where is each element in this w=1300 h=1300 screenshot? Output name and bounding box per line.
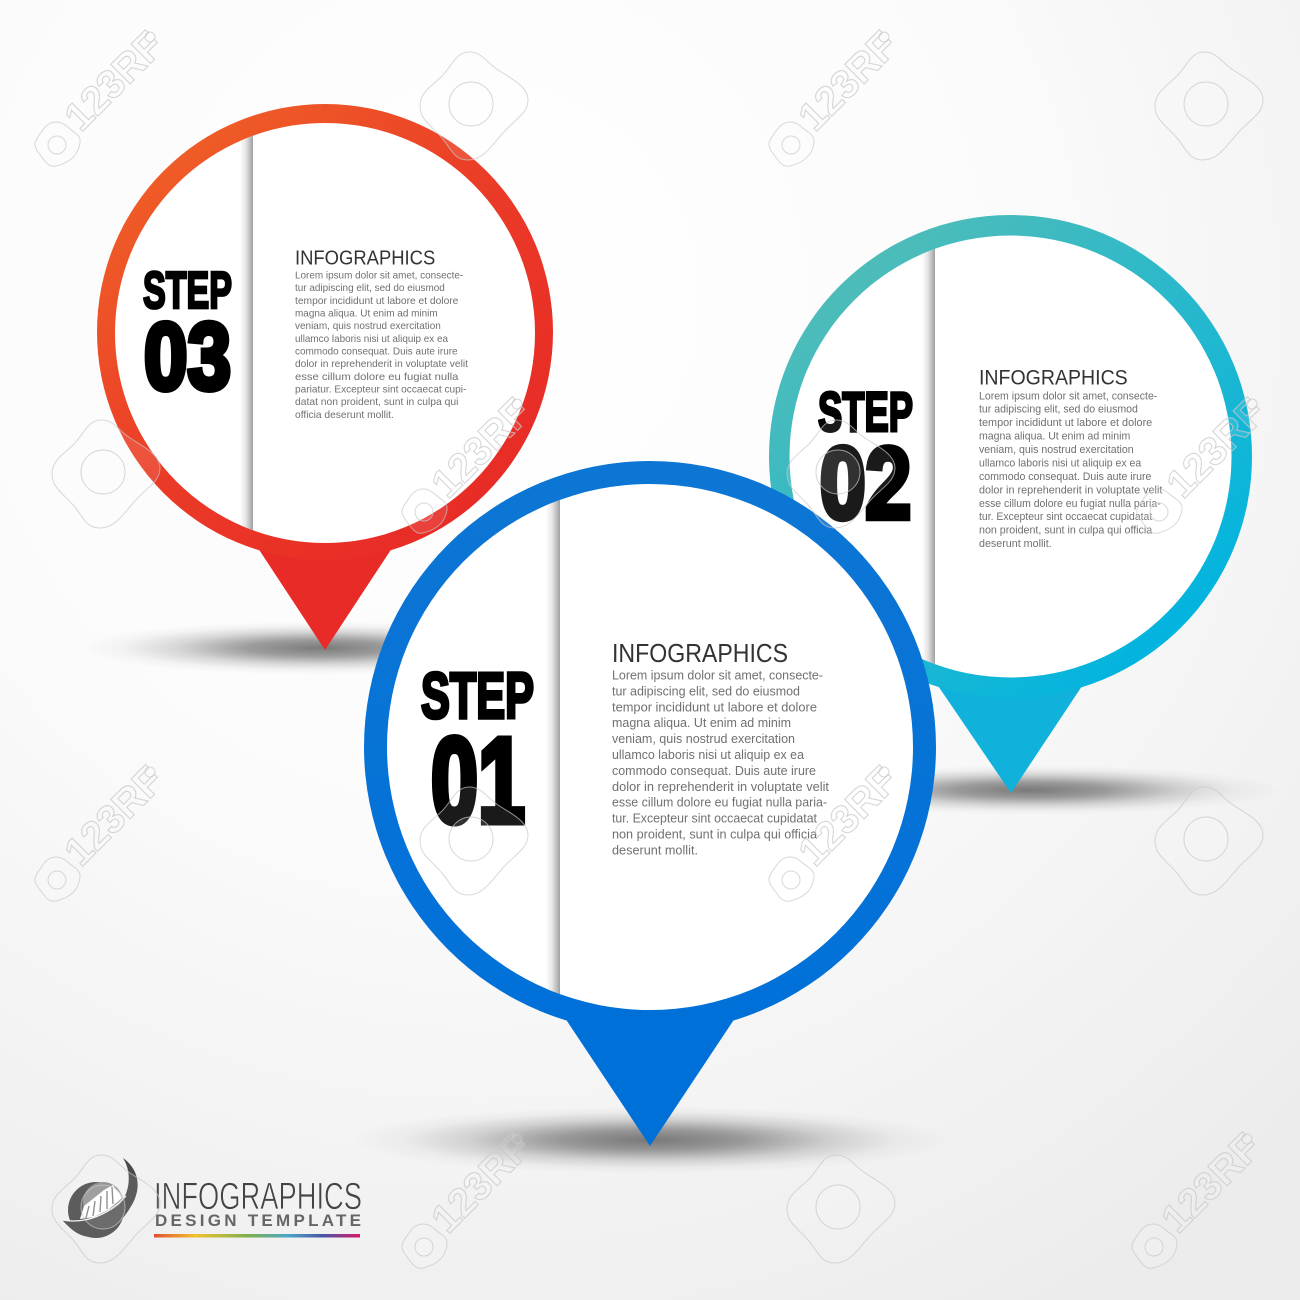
text block: step 02: deserunt mollit. — [979, 538, 1052, 550]
step label: step 01 — [421, 659, 534, 848]
text block: step 03: magna aliqua. Ut enim ad minim — [295, 308, 438, 319]
text block: step 03: esse cillum dolore eu fugiat nulla — [295, 372, 459, 383]
pin ring: blue — [364, 461, 936, 1033]
text block: step 01: magna aliqua. Ut enim ad minim — [612, 716, 791, 730]
text block: step 02: dolor in reprehenderit in voluptate velit — [979, 484, 1162, 496]
step label: step 02: 02 — [820, 428, 911, 540]
text block: step 03: tempor incididunt ut labore et dolore — [295, 296, 459, 307]
step label: step 03: 03 — [144, 304, 231, 410]
text block: step 02: Lorem ipsum dolor sit amet, consecte- — [979, 390, 1158, 402]
text block: step 01: dolor in reprehenderit in voluptate velit — [612, 780, 829, 794]
text block: step 01: Lorem ipsum dolor sit amet, consecte- — [612, 668, 823, 682]
text block: step 03: dolor in reprehenderit in voluptate velit — [295, 359, 468, 370]
pin pointer: blue — [561, 1012, 739, 1146]
shadow: blue pin — [350, 1106, 950, 1174]
rainbow bar — [154, 1234, 360, 1238]
step label: step 01: 01 — [431, 712, 525, 848]
watermarks: 123RF — [56, 23, 172, 139]
text block: step 02: veniam, quis nostrud exercitation — [979, 444, 1134, 456]
panel: step 03 red pin — [97, 100, 553, 650]
watermarks: 123RF — [423, 1125, 539, 1241]
text block: step 01: esse cillum dolore eu fugiat nulla paria- — [612, 796, 827, 810]
text block: step 01: commodo consequat. Duis aute irure — [612, 764, 816, 778]
text block: step 02: non proident, sunt in culpa qui officia — [979, 525, 1152, 537]
text block: step 01: veniam, quis nostrud exercitation — [612, 732, 795, 746]
logo: infographics design template — [62, 1158, 362, 1238]
text block: step 03: commodo consequat. Duis aute irure — [295, 346, 458, 357]
text block: step 02: commodo consequat. Duis aute irure — [979, 471, 1151, 483]
fold shadow: blue — [546, 500, 560, 994]
text block: step 03: veniam, quis nostrud exercitation — [295, 321, 441, 332]
fold shadow: teal — [922, 248, 935, 664]
text block: step 01: INFOGRAPHICS — [612, 640, 788, 668]
pin pointer: red — [254, 542, 396, 650]
text block: step 01: tempor incididunt ut labore et dolore — [612, 700, 817, 714]
step label: step 01: STEP — [421, 659, 534, 732]
text block: step 02: ullamco laboris nisi ut aliquip ex ea — [979, 457, 1141, 469]
text block: step 01: non proident, sunt in culpa qui officia — [612, 828, 817, 842]
panel: step 02 teal pin — [769, 200, 1252, 793]
pin face: blue — [387, 484, 913, 1010]
step label: step 03: STEP — [143, 262, 232, 320]
text block: step 03: officia deserunt mollit. — [295, 410, 394, 421]
watermarks: 123RF — [790, 758, 906, 874]
text block: step 02: tur. Excepteur sint occaecat cupidatat — [979, 511, 1152, 523]
text block: step 02: magna aliqua. Ut enim ad minim — [979, 431, 1130, 443]
pin ring: red — [97, 104, 553, 560]
shadow: teal pin — [780, 765, 1280, 815]
watermarks: 123RF — [790, 23, 906, 139]
pin ring: teal — [769, 215, 1252, 698]
shadow: red pin — [80, 621, 560, 675]
watermarks: 123RF — [423, 390, 539, 506]
text block: step 02 — [979, 366, 1162, 550]
text block: step 02: esse cillum dolore eu fugiat nulla paria- — [979, 498, 1161, 510]
logo title: INFOGRAPHICS — [154, 1176, 362, 1218]
text block: step 01: tur. Excepteur sint occaecat cupidatat — [612, 812, 817, 826]
text block: step 03: INFOGRAPHICS — [295, 247, 435, 269]
text block: step 02: tempor incididunt ut labore et dolore — [979, 417, 1152, 429]
icon: swoosh globe — [62, 1158, 138, 1238]
pin pointer: teal — [932, 677, 1088, 793]
step label: step 02 — [818, 380, 913, 540]
text block: step 03: datat non proident, sunt in culpa qui — [295, 397, 458, 408]
text block: step 02: INFOGRAPHICS — [979, 366, 1128, 390]
text block: step 01: deserunt mollit. — [612, 843, 698, 857]
text block: step 01: ullamco laboris nisi ut aliquip ex ea — [612, 748, 804, 762]
text block: step 01: tur adipiscing elit, sed do eiusmod — [612, 684, 800, 698]
text block: step 01 — [612, 640, 829, 857]
watermarks: 123RF — [1158, 390, 1274, 506]
step label: step 02: STEP — [818, 380, 913, 443]
text block: step 03 — [295, 248, 468, 421]
watermarks: 123RF — [1153, 1125, 1269, 1241]
panel: step 01 blue pin — [364, 461, 936, 1146]
text block: step 03: tur adipiscing elit, sed do eiusmod — [295, 283, 445, 294]
fold shadow: red — [240, 136, 253, 530]
text block: step 03: ullamco laboris nisi ut aliquip ex ea — [295, 334, 448, 345]
pin face: red — [115, 123, 535, 543]
pin face: teal — [790, 236, 1232, 678]
text block: step 03: pariatur. Excepteur sint occaecat cupi- — [295, 384, 466, 395]
logo subtitle: DESIGN TEMPLATE — [155, 1211, 361, 1230]
step label: step 03 — [143, 262, 232, 410]
text block: step 03: Lorem ipsum dolor sit amet, consecte- — [295, 270, 463, 281]
text block: step 02: tur adipiscing elit, sed do eiusmod — [979, 404, 1138, 416]
watermarks: 123RF — [56, 758, 172, 874]
